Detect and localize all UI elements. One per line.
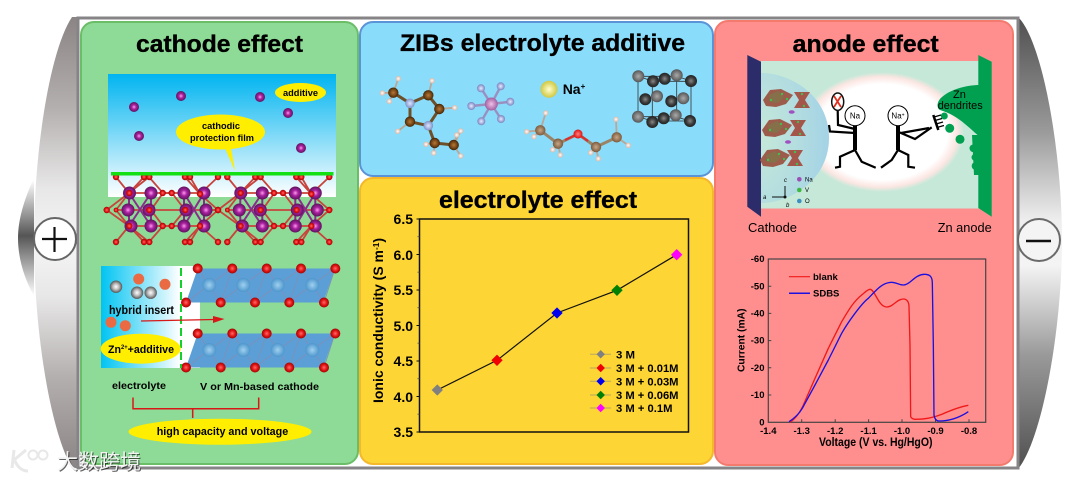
y axis ticks and labels: -30 xyxy=(751,336,764,346)
layered crystals xyxy=(760,89,810,167)
y axis ticks and labels: 0 xyxy=(759,418,764,428)
axes and element legend: a xyxy=(763,195,767,201)
y axis title: -1 xyxy=(372,242,381,250)
positive symbol xyxy=(34,218,76,260)
y axis ticks and labels: -20 xyxy=(751,363,764,374)
cathodic protection film callout: protection film xyxy=(190,133,254,144)
data markers xyxy=(432,249,682,396)
y axis labels: 4.0 xyxy=(394,389,413,405)
diagram: protection film xyxy=(104,74,336,245)
zn additive label: +additive xyxy=(128,344,174,356)
chart legend xyxy=(789,272,839,300)
heading: ZIBs electrolyte additive: ZIBs electrolyte additive xyxy=(400,30,685,57)
positive terminal nub xyxy=(18,180,34,296)
legend: 3 M + 0.01M xyxy=(616,363,678,375)
Zn dendrites: dendrites xyxy=(938,100,983,112)
cathode plate xyxy=(747,55,761,217)
x axis ticks and labels: -1.1 xyxy=(860,426,877,437)
sodium ion xyxy=(540,81,586,98)
ions xyxy=(106,274,170,331)
y axis ticks and labels: -50 xyxy=(751,282,764,292)
y axis ticks and labels: -40 xyxy=(751,308,764,320)
additive label xyxy=(275,83,326,102)
heading: electrolyte effect: electrolyte effect xyxy=(439,187,637,214)
y axis ticks and labels: -10 xyxy=(751,390,764,401)
panel: electrolyte effect xyxy=(360,178,713,464)
watermark xyxy=(12,450,142,475)
x axis ticks and labels: -1.2 xyxy=(827,426,843,437)
axes and element legend xyxy=(763,177,813,209)
diagram: hybrid insertion xyxy=(101,264,340,445)
sodium ion: + xyxy=(581,82,586,91)
cathodic protection film callout xyxy=(176,114,265,171)
Zn dendrites: Zn xyxy=(953,89,966,101)
cathode label: V or Mn-based cathode xyxy=(200,381,319,393)
y axis labels: 5.0 xyxy=(394,318,413,334)
insertion arrow xyxy=(141,316,224,323)
sodium ion: Na xyxy=(563,81,581,97)
figure: Na fighter with rake: Na xyxy=(891,112,902,120)
y axis ticks and labels xyxy=(751,254,764,428)
y axis labels: 4.5 xyxy=(394,353,413,369)
panel: cathode effect xyxy=(81,22,358,464)
molecule: diethyl ether xyxy=(524,110,631,161)
x axis ticks and labels xyxy=(760,426,977,437)
zn additive label: Zn xyxy=(108,344,121,356)
legend: 3 M + 0.06M xyxy=(616,390,678,402)
chart legend: SDBS xyxy=(813,288,839,300)
additive label: additive xyxy=(283,88,318,99)
figure: Na fighter with racket: Na xyxy=(850,112,861,120)
high capacity and voltage label xyxy=(128,419,312,445)
panel: ZIBs electrolyte additive xyxy=(360,22,713,176)
y axis title: Ionic conductivity (S m xyxy=(371,255,386,403)
electrolyte label: electrolyte xyxy=(112,380,166,392)
watermark: 大数跨境 xyxy=(58,452,142,475)
line chart: voltage vs current xyxy=(736,254,986,449)
y axis title: Current (mA) xyxy=(736,308,748,372)
axes and element legend: O xyxy=(805,199,810,205)
y axis labels: 3.5 xyxy=(394,424,413,440)
legend xyxy=(590,349,678,415)
y axis labels: 6.0 xyxy=(394,247,413,263)
zinc unit cell xyxy=(632,69,697,128)
axes and element legend: V xyxy=(805,188,809,194)
axes and element legend: c xyxy=(784,178,787,184)
SDBS curve xyxy=(789,274,968,422)
heading: cathode effect: cathode effect xyxy=(136,31,303,58)
figure: Na fighter with rake: + xyxy=(902,112,905,118)
left cap body xyxy=(34,17,77,468)
protection film bar xyxy=(111,172,334,176)
blank curve xyxy=(790,289,968,422)
axes and element legend: Na xyxy=(805,178,813,184)
Zn anode label: Zn anode xyxy=(938,220,992,235)
y axis ticks and labels: -60 xyxy=(751,254,764,265)
y axis labels: 5.5 xyxy=(394,282,413,298)
x axis ticks and labels: -0.9 xyxy=(927,426,944,437)
x axis ticks and labels: -1.3 xyxy=(794,426,810,437)
additive particles xyxy=(129,91,306,153)
chart legend: blank xyxy=(813,272,839,283)
zn additive label: 2+ xyxy=(121,345,128,351)
legend: 3 M + 0.03M xyxy=(616,376,678,388)
figure: Na fighter with racket xyxy=(829,93,876,168)
x axis ticks and labels: -0.8 xyxy=(961,426,977,437)
layered cathode xyxy=(181,264,340,372)
high capacity and voltage label: high capacity and voltage xyxy=(157,426,288,438)
line chart: ionic conductivity xyxy=(371,211,688,440)
axes and element legend: b xyxy=(786,203,790,209)
legend: 3 M + 0.1M xyxy=(616,403,672,415)
x axis ticks and labels: -1.0 xyxy=(894,426,910,437)
molecule: imidazolium cation xyxy=(380,76,463,159)
molecule: PF6 anion xyxy=(467,82,514,125)
crystal structure xyxy=(104,174,332,245)
cathode label: Cathode xyxy=(748,220,797,235)
battery right cap xyxy=(1018,17,1062,469)
hybrid insert label: hybrid insert xyxy=(109,305,174,317)
y axis labels xyxy=(394,211,413,440)
y axis labels: 6.5 xyxy=(394,211,413,227)
legend: 3 M xyxy=(616,349,635,361)
data line xyxy=(437,255,677,390)
diagram: Zn dendrite suppression xyxy=(747,55,992,235)
y axis title: ) xyxy=(371,238,386,243)
Zn dendrites xyxy=(938,85,983,175)
bracket xyxy=(133,398,259,418)
panel: anode effect xyxy=(715,21,1013,465)
battery left cap xyxy=(18,17,77,468)
watermark: 大数跨境 xyxy=(57,451,141,474)
heading: anode effect: anode effect xyxy=(793,31,939,58)
cathodic protection film callout: cathodic xyxy=(202,121,240,132)
Zn anode plate xyxy=(978,55,992,217)
zn additive label xyxy=(101,334,181,364)
x axis title: Voltage (V vs. Hg/HgO) xyxy=(819,437,933,449)
figure: Na fighter with rake xyxy=(881,106,944,168)
x axis ticks and labels: -1.4 xyxy=(760,426,777,437)
negative symbol xyxy=(1018,219,1060,261)
